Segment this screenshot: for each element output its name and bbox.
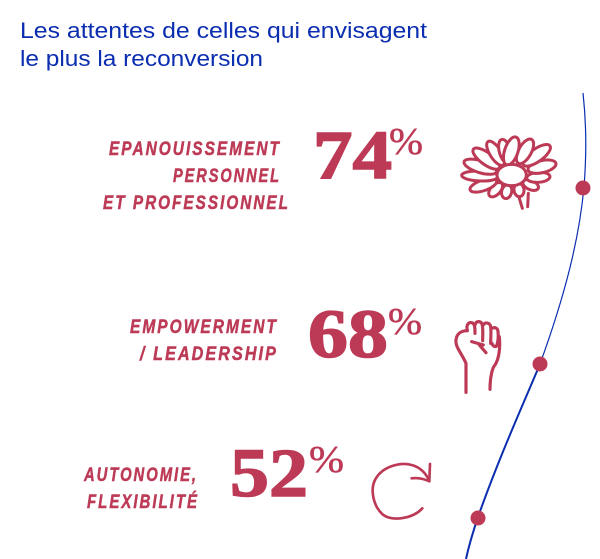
icon: daisy flower bbox=[462, 135, 557, 208]
title: Les attentes de celles qui envisagent bbox=[20, 18, 428, 43]
number: 68% bbox=[308, 296, 422, 372]
number: 74%: 74 bbox=[313, 117, 392, 193]
item: autonomie 52% bbox=[83, 435, 430, 518]
title: le plus la reconversion bbox=[20, 46, 263, 71]
label: autonomie bbox=[83, 465, 199, 513]
item: empowerment 68% bbox=[130, 296, 500, 392]
number: 52% bbox=[230, 435, 344, 511]
number: 52%: 52 bbox=[230, 435, 308, 511]
number: 68%: % bbox=[388, 301, 422, 343]
label: empowerment bbox=[130, 317, 278, 365]
number: 68%: 68 bbox=[308, 296, 388, 372]
label: empowerment: EMPOWERMENT bbox=[130, 317, 278, 338]
number: 74% bbox=[313, 117, 423, 193]
title bbox=[20, 18, 428, 71]
icon: circular arrow bbox=[373, 464, 430, 518]
item: epanouissement 74% bbox=[103, 117, 557, 214]
label: epanouissement: ET PROFESSIONNEL bbox=[103, 193, 290, 214]
icon: raised fist bbox=[456, 322, 500, 392]
label: autonomie: FLEXIBILITÉ bbox=[87, 491, 199, 513]
label: empowerment: / LEADERSHIP bbox=[139, 344, 278, 365]
label: epanouissement: PERSONNEL bbox=[173, 166, 281, 187]
timeline curve with markers bbox=[466, 93, 590, 559]
number: 52%: % bbox=[309, 439, 344, 481]
label: epanouissement: EPANOUISSEMENT bbox=[109, 139, 281, 160]
label: autonomie: AUTONOMIE, bbox=[83, 465, 198, 486]
label: epanouissement bbox=[103, 139, 290, 214]
number: 74%: % bbox=[389, 121, 423, 163]
